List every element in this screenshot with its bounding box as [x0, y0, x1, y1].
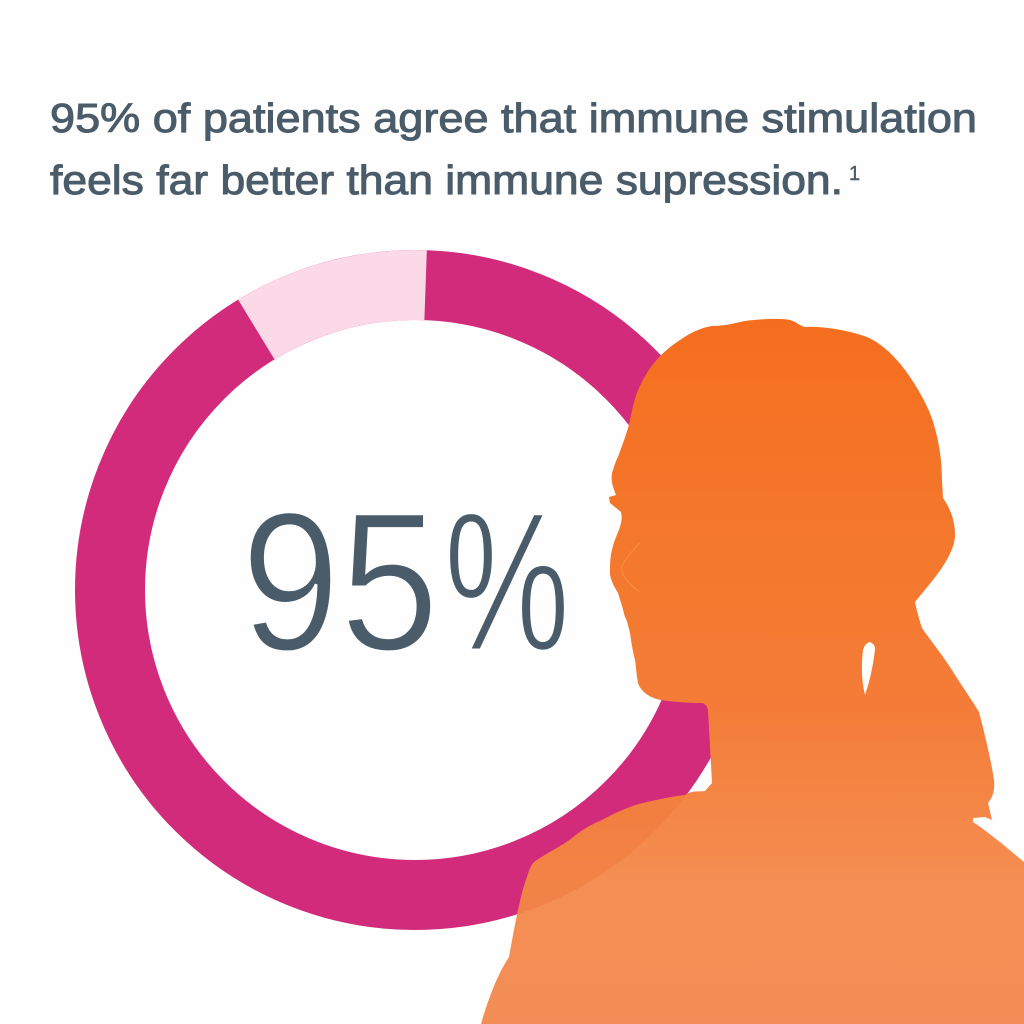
center value: 95: [241, 471, 439, 692]
center value: [241, 471, 570, 692]
heading: [50, 95, 977, 203]
ring: remaining light segment: [256, 285, 426, 330]
heading: 1: [849, 163, 860, 185]
ring showing faintly through shoulder: [517, 795, 684, 914]
heading: 95% of patients agree that immune stimulation: [50, 95, 977, 141]
cheek highlight: [621, 543, 640, 592]
ring: 95% value segment: [110, 285, 720, 895]
center value: %: [444, 471, 570, 692]
donut chart: [110, 285, 720, 895]
woman silhouette: [481, 318, 1024, 1024]
heading: feels far better than immune supression.: [50, 157, 843, 203]
